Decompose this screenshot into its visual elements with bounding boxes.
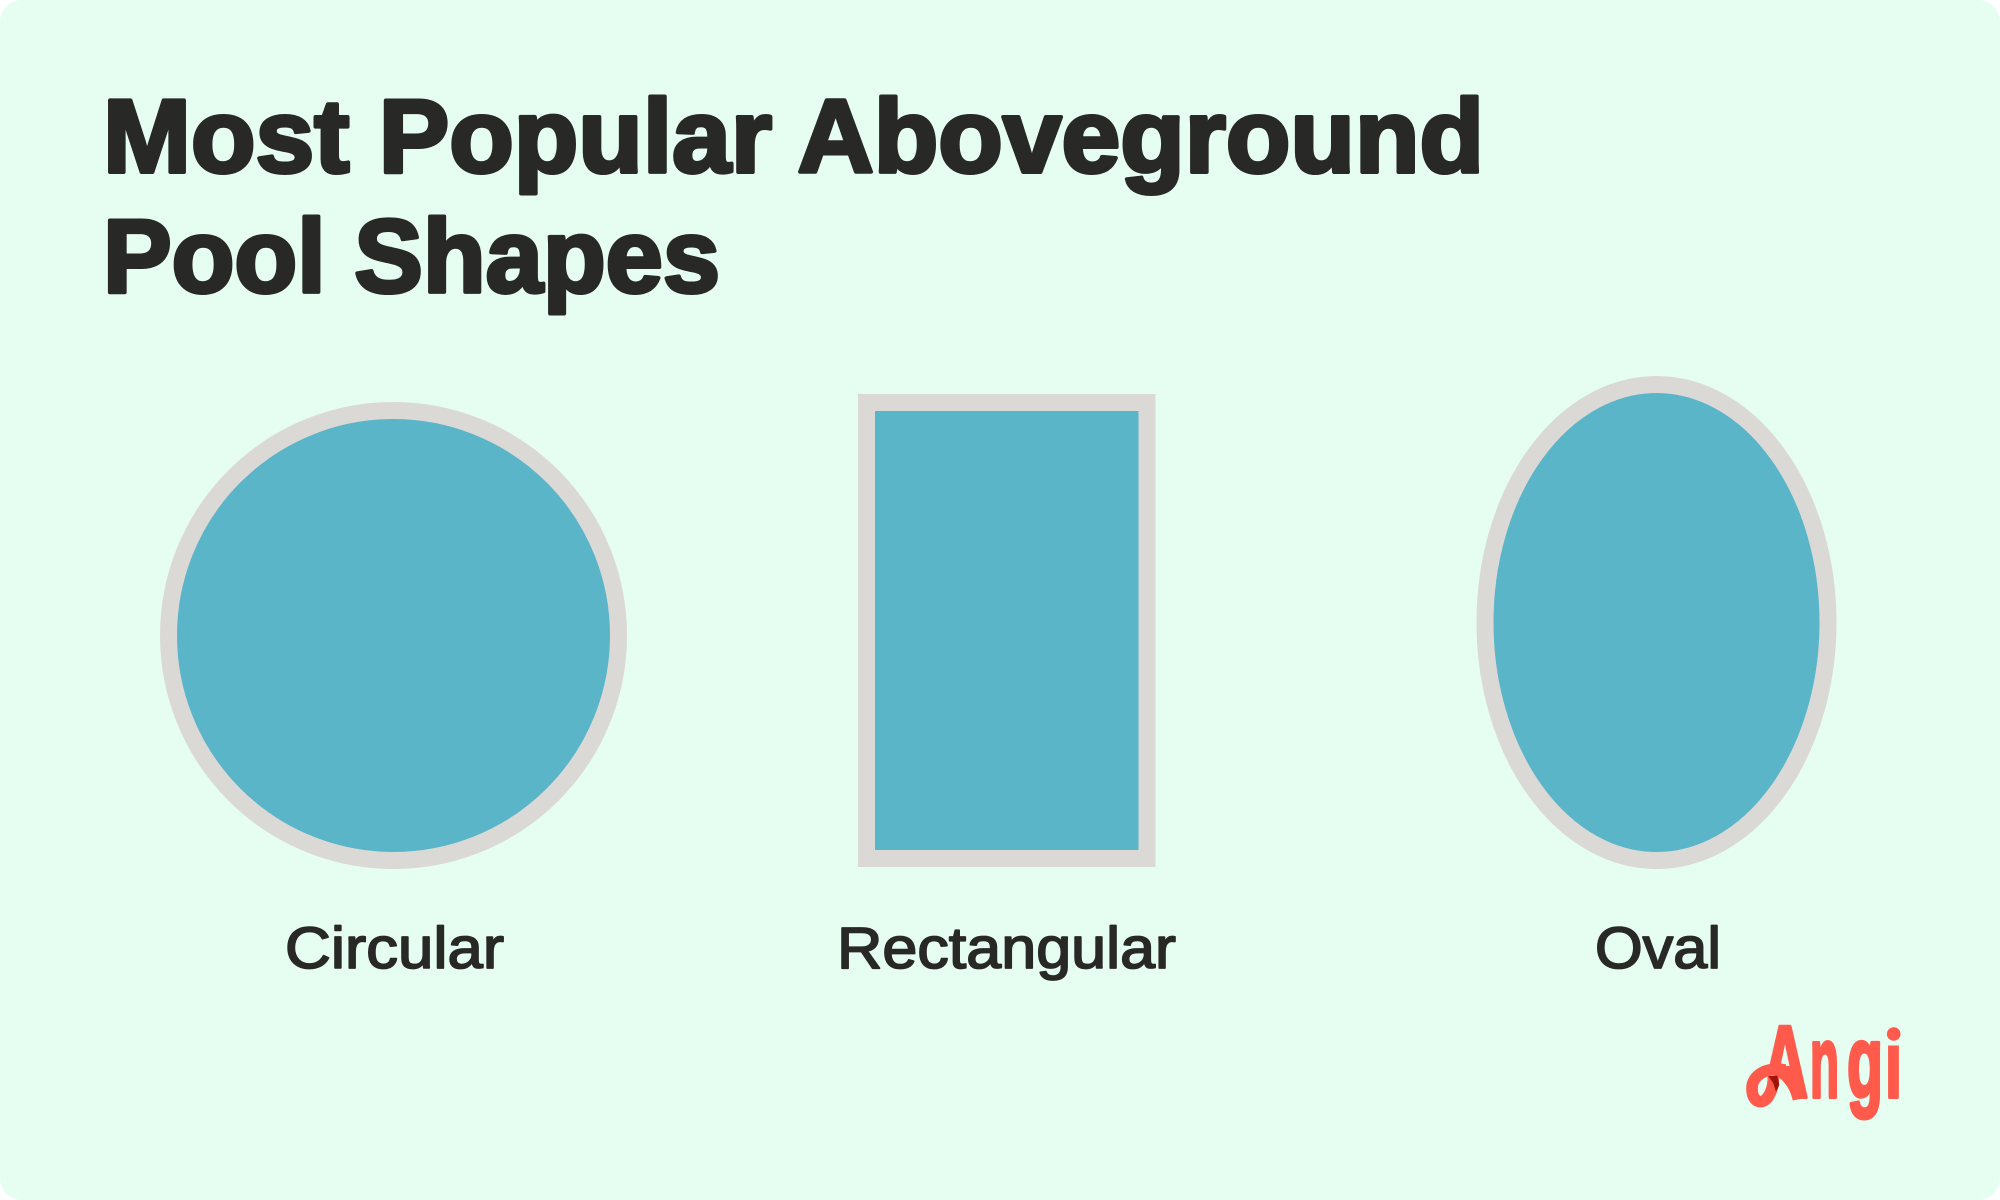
Angi logo: n — [1810, 1005, 1839, 1119]
Angi logo: A — [1762, 1005, 1808, 1119]
rectangular pool shape — [866, 402, 1147, 858]
label: oval: Oval — [1595, 916, 1721, 981]
title — [103, 79, 1484, 315]
oval pool shape — [1485, 384, 1828, 860]
Angi logo — [1746, 1024, 1900, 1120]
Angi logo: g — [1847, 1005, 1883, 1119]
circular pool shape — [168, 410, 618, 860]
title: Most Popular Aboveground — [103, 79, 1484, 195]
Angi logo: i — [1885, 1005, 1902, 1119]
title: Pool Shapes — [103, 199, 720, 315]
label: rectangular: Rectangular — [837, 916, 1176, 981]
label: circular: Circular — [285, 916, 504, 981]
